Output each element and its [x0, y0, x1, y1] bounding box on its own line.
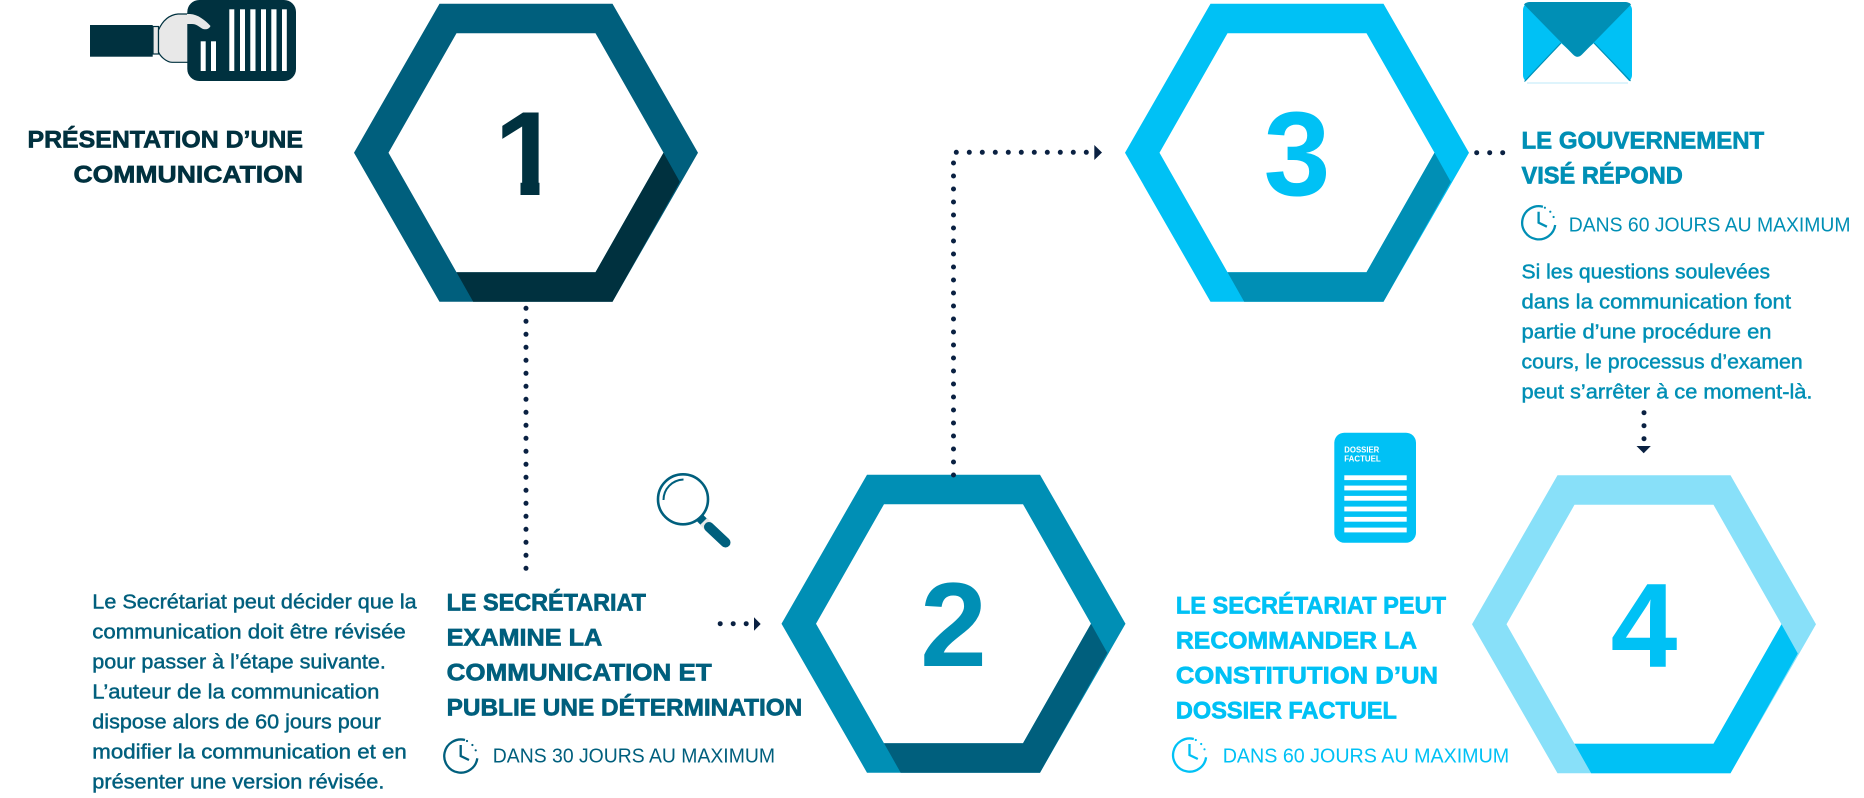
- icon: factual file document: [1334, 433, 1416, 543]
- text block: ongoing procedure note: Si les questions soulevées: [1522, 260, 1770, 283]
- text block: ongoing procedure note: [1522, 260, 1812, 403]
- text block: revision note: communication doit être révisée: [92, 620, 406, 643]
- panel: step 2: [92, 474, 1125, 793]
- icon: clock 60 days: [1522, 206, 1555, 239]
- heading: step 4: [1176, 591, 1446, 724]
- icon: hand holding document: [90, 0, 296, 81]
- icon: clock 60 days: [1173, 738, 1206, 772]
- heading: step 4: CONSTITUTION D’UN: [1176, 662, 1438, 689]
- text block: revision note: pour passer à l’étape suivante.: [92, 650, 386, 673]
- icon: factual file document: FACTUEL: [1344, 454, 1381, 464]
- text block: revision note: Le Secrétariat peut décider que la: [92, 590, 417, 613]
- hexagon 1: [354, 4, 698, 302]
- label: within 60 days: DANS 60 JOURS AU MAXIMUM: [1223, 745, 1509, 768]
- text block: revision note: présenter une version révisée.: [92, 770, 384, 793]
- heading: step 3: [1522, 127, 1764, 189]
- text block: ongoing procedure note: cours, le processus d’examen: [1522, 350, 1803, 373]
- heading: step 2: LE SECRÉTARIAT: [447, 589, 646, 617]
- heading: step 2: EXAMINE LA: [447, 625, 603, 652]
- number 1: 1: [494, 87, 561, 221]
- connector: dotted line from hexagon 1 to step 2 text: [524, 308, 528, 569]
- arrow: dotted arrow from step 3 text to hexagon 4: [1636, 413, 1651, 453]
- heading: step 3: LE GOUVERNEMENT: [1522, 127, 1764, 154]
- text block: ongoing procedure note: dans la communication font: [1522, 290, 1791, 313]
- heading: step 4: LE SECRÉTARIAT PEUT: [1176, 591, 1446, 619]
- text block: revision note: modifier la communication et en: [92, 740, 407, 763]
- hexagon 3: [1125, 4, 1469, 302]
- text block: revision note: [92, 590, 417, 793]
- heading: step 3: VISÉ RÉPOND: [1522, 161, 1683, 189]
- icon: factual file document: DOSSIER: [1344, 445, 1379, 455]
- panel: step 3: [1125, 2, 1850, 403]
- heading: step 1: PRÉSENTATION D’UNE: [28, 126, 303, 154]
- label: within 60 days: DANS 60 JOURS AU MAXIMUM: [1569, 214, 1850, 237]
- heading: step 1: COMMUNICATION: [74, 162, 303, 189]
- hexagon 2: [782, 475, 1126, 773]
- number 3: 3: [1264, 87, 1330, 221]
- hexagon 4: [1472, 475, 1816, 773]
- icon: envelope: [1523, 2, 1632, 83]
- number 4: 4: [1611, 559, 1678, 693]
- panel: step 1: [28, 0, 698, 302]
- arrow: dotted arrow from step 2 text to hexagon 2: [720, 617, 761, 631]
- heading: step 2: PUBLIE UNE DÉTERMINATION: [447, 694, 802, 722]
- heading: step 4: RECOMMANDER LA: [1176, 627, 1417, 654]
- icon: magnifying glass: [658, 474, 726, 542]
- text block: revision note: dispose alors de 60 jours pour: [92, 710, 381, 733]
- panel: step 4: [1173, 433, 1816, 773]
- heading: step 2: [447, 589, 802, 722]
- heading: step 2: COMMUNICATION ET: [447, 660, 712, 687]
- text block: ongoing procedure note: peut s’arrêter à ce moment-là.: [1522, 380, 1812, 403]
- number 2: 2: [920, 558, 987, 692]
- label: within 30 days: DANS 30 JOURS AU MAXIMUM: [493, 745, 775, 768]
- icon: clock 30 days: [444, 739, 477, 773]
- text block: revision note: L’auteur de la communication: [92, 680, 379, 703]
- text block: ongoing procedure note: partie d’une procédure en: [1522, 320, 1772, 343]
- heading: step 1: [28, 126, 303, 189]
- heading: step 4: DOSSIER FACTUEL: [1176, 697, 1397, 724]
- arrow: dotted arrow from hexagon 2 to hexagon 3: [954, 145, 1102, 475]
- connector: dots from hexagon 3 to text: [1477, 150, 1505, 155]
